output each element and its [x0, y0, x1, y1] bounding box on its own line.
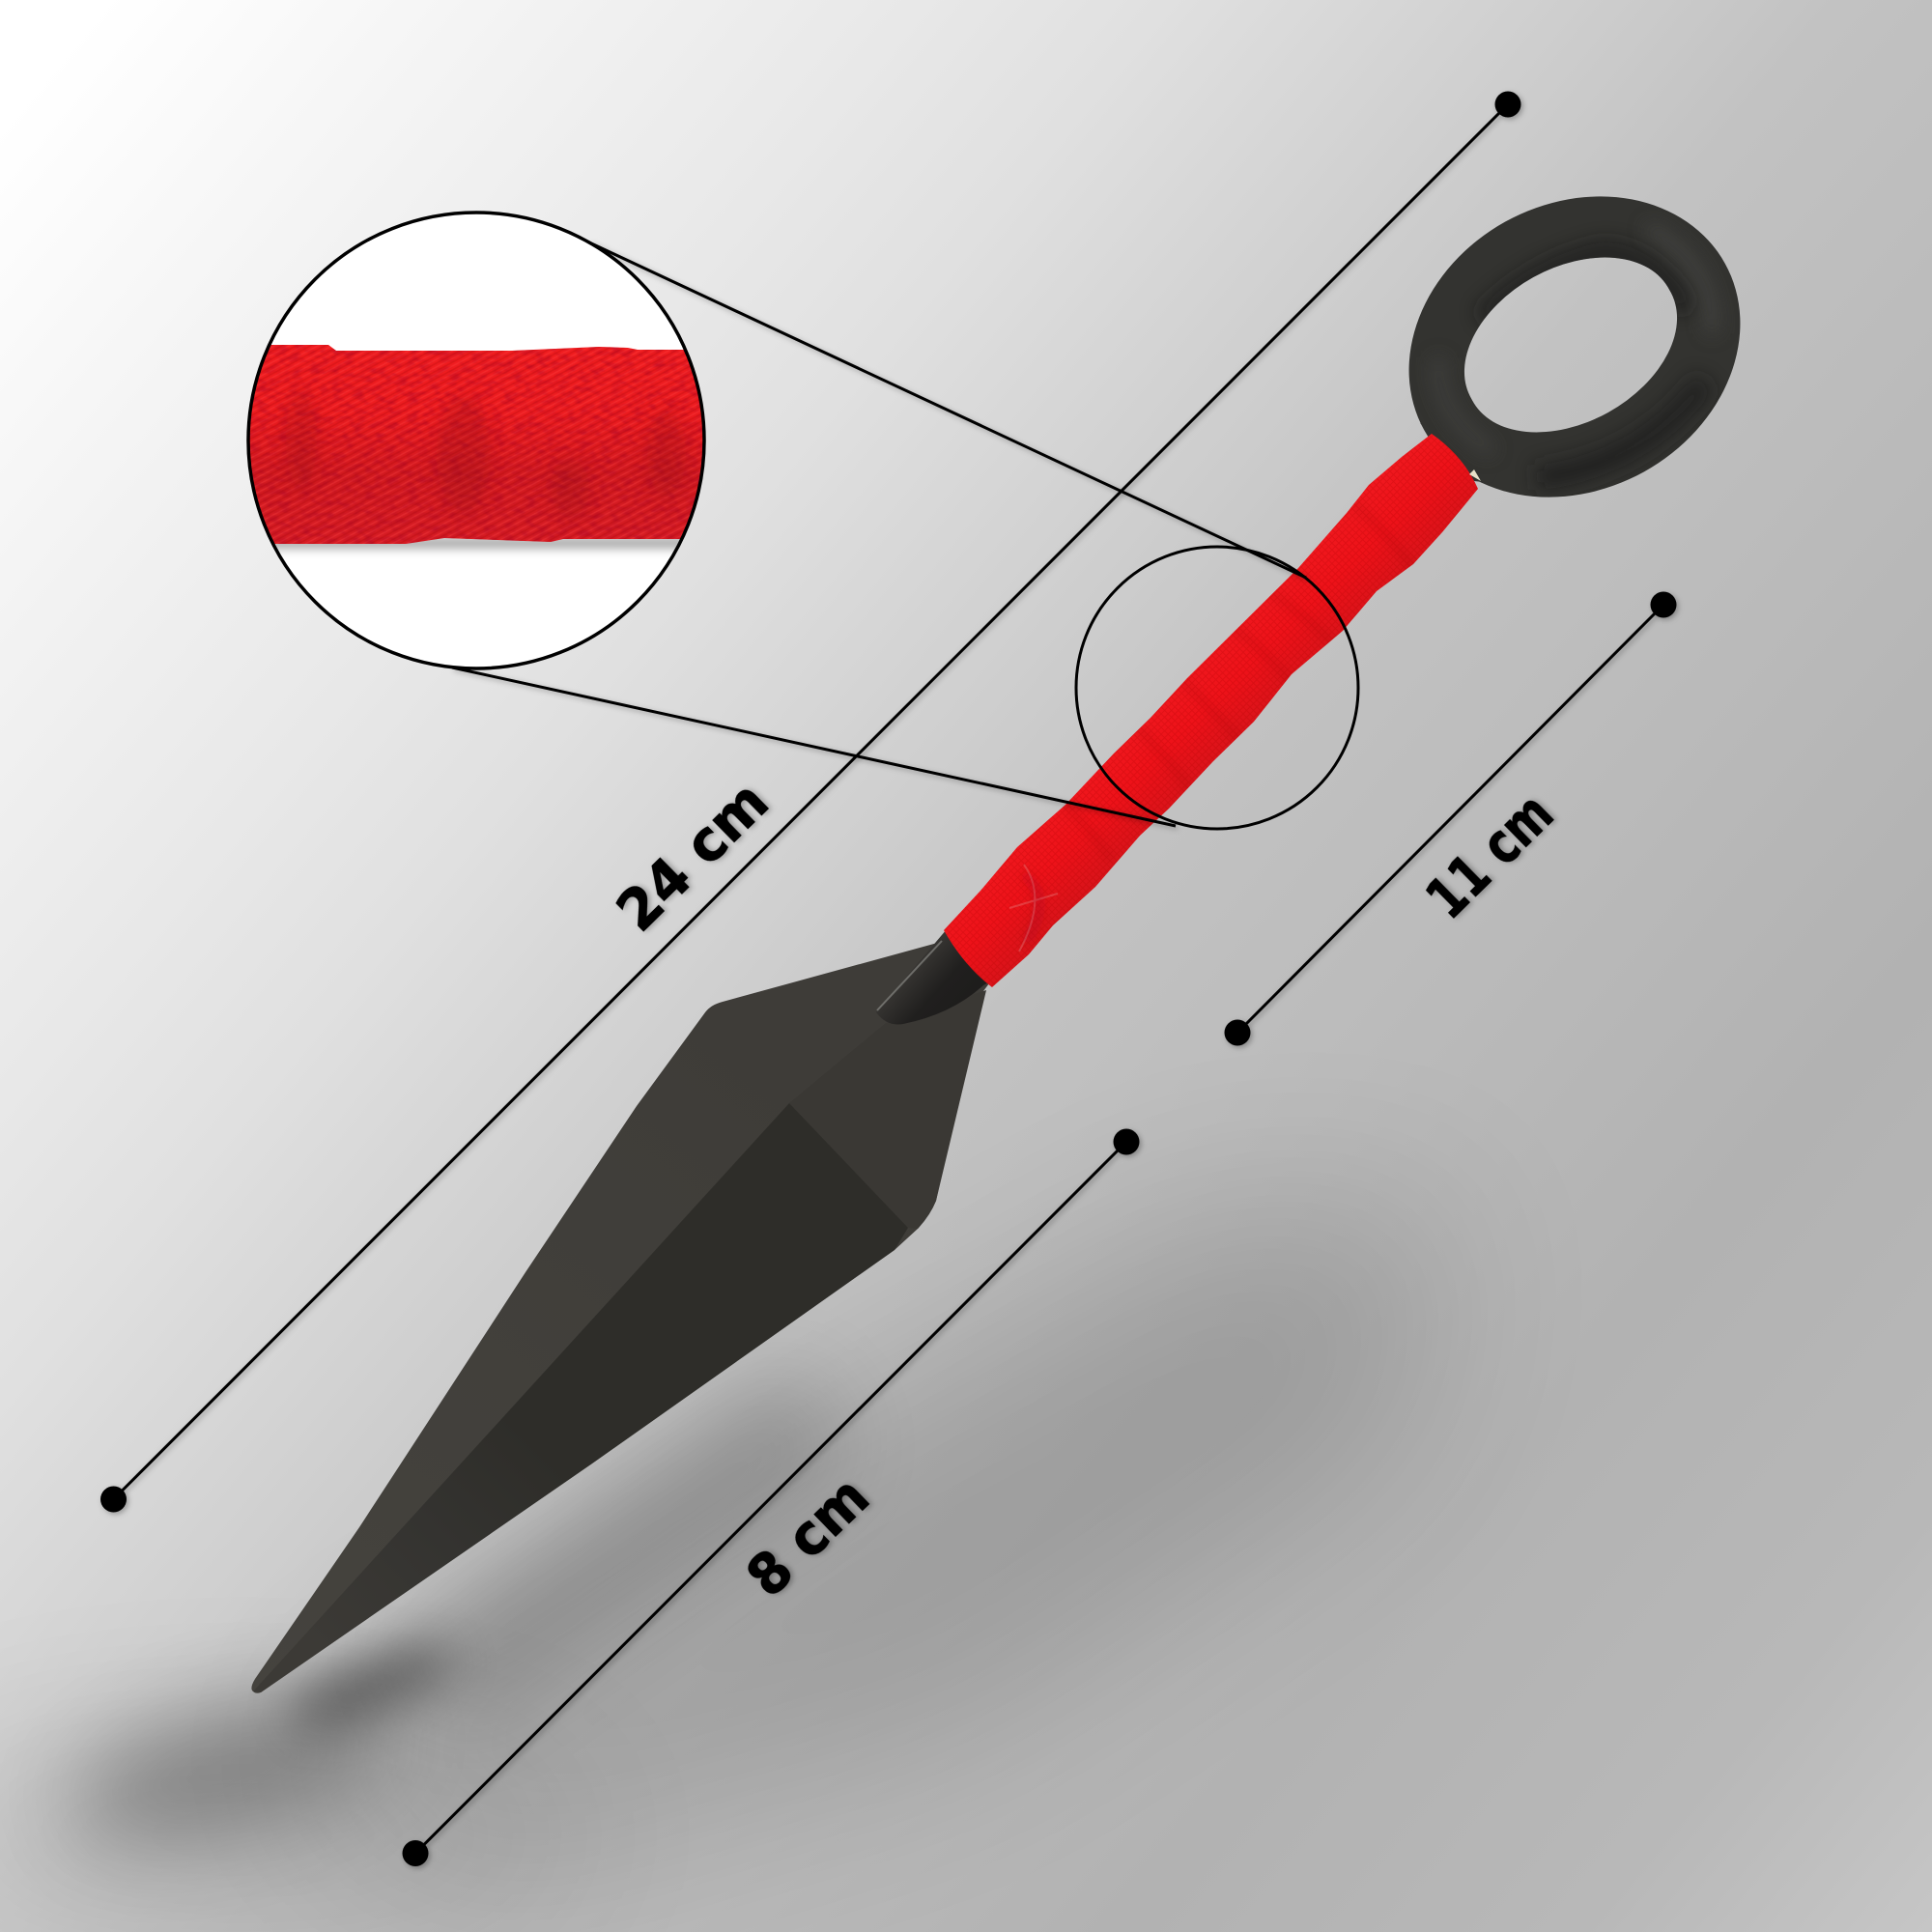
magnified fabric detail circle	[246, 211, 706, 670]
red wrapped handle	[944, 434, 1481, 987]
red fabric band	[232, 338, 821, 551]
dimension line: overall length 24 cm	[100, 91, 1520, 1513]
kunai knife	[251, 196, 1740, 1693]
band shadow	[232, 537, 724, 549]
dimension line: blade length 8 cm	[402, 1128, 1140, 1866]
dimension label: 24 cm: 24 cm	[604, 768, 781, 944]
dimension line: handle length 11 cm	[1225, 591, 1677, 1045]
dimension label: 8 cm: 8 cm	[733, 1463, 881, 1609]
ring pommel	[1409, 196, 1740, 497]
callout connector: upper	[589, 242, 1306, 578]
dimension label: 11 cm: 11 cm	[1413, 781, 1566, 931]
blade	[251, 939, 995, 1693]
callout connector: lower	[452, 668, 1176, 826]
blade tang	[876, 929, 997, 1024]
soft cast shadow under the blade	[0, 1208, 1449, 1922]
zoom source circle on the handle	[1076, 547, 1358, 829]
